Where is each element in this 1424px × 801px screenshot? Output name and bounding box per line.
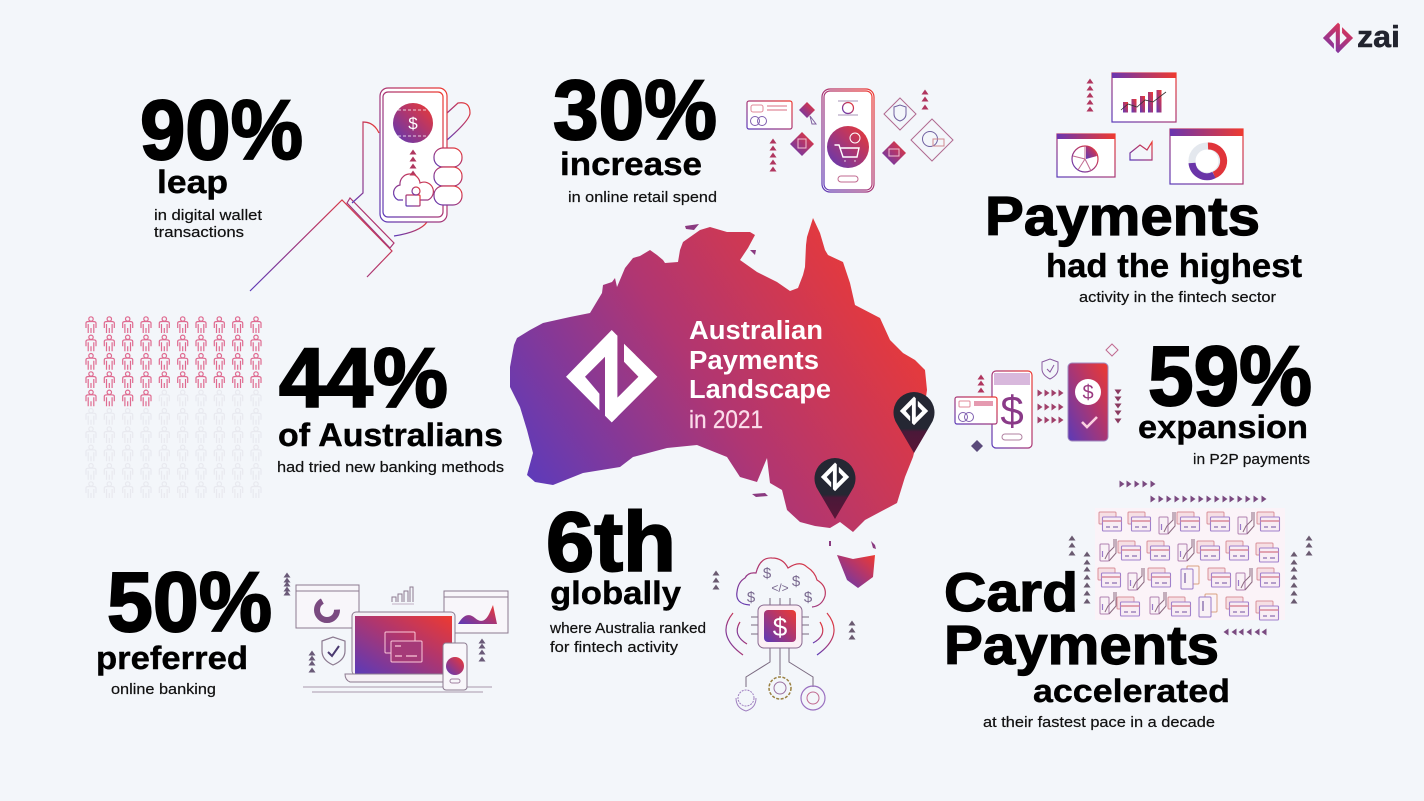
stat: card payments accelerated: Payments [944, 614, 1219, 676]
stat: 6th globally: globally [550, 575, 681, 611]
stat: card payments accelerated [944, 561, 1230, 731]
map title: Payments [689, 347, 819, 375]
pictogram: 44 of 100 people [86, 317, 261, 498]
Tasmania [837, 555, 875, 588]
icon: fintech cloud chip: </> [771, 581, 789, 595]
icon: analytics windows [1057, 73, 1243, 184]
stat: 90% leap: transactions [154, 225, 244, 241]
icon: P2P phones: $ [1082, 382, 1094, 404]
stat: 59% expansion: in P2P payments [1193, 452, 1310, 468]
stat: 44% of Australians: of Australians [278, 417, 503, 453]
stat: 44% of Australians: had tried new banking methods [277, 460, 504, 476]
stat: 50% preferred: preferred [96, 640, 248, 676]
stat: 30% increase: in online retail spend [568, 190, 717, 206]
map logo mark [566, 330, 657, 422]
icon: hand holding phone: $ [408, 114, 418, 133]
stat: payments had the highest: had the highest [1046, 247, 1302, 284]
map title: Landscape [689, 376, 831, 404]
map pin: Sydney [893, 392, 934, 453]
stat: payments had the highest: activity in the fintech sector [1079, 290, 1276, 306]
stat: 50% preferred: 50% [107, 555, 272, 649]
stat: 59% expansion: expansion [1138, 409, 1308, 445]
stat: 6th globally: where Australia ranked [549, 621, 706, 637]
coloured people [86, 317, 261, 406]
stat: 90% leap: in digital wallet [154, 208, 262, 224]
icon: fintech cloud chip: $ [747, 589, 756, 606]
stat: 44% of Australians [277, 331, 504, 476]
stat: card payments accelerated: at their fastest pace in a decade [983, 715, 1215, 731]
logo mark [1323, 23, 1353, 53]
icon: grid of payment cards [1068, 480, 1312, 636]
stat: 6th globally: for fintech activity [550, 640, 679, 656]
stat: 59% expansion: 59% [1148, 329, 1312, 423]
stat: card payments accelerated: Card [944, 561, 1078, 623]
stat: 30% increase: increase [560, 146, 702, 182]
icon: fintech cloud chip: $ [792, 573, 801, 590]
stat: 50% preferred: online banking [111, 682, 216, 698]
icon: online banking devices [284, 572, 508, 692]
stat: card payments accelerated: accelerated [1033, 673, 1230, 709]
icon: P2P phones [955, 344, 1122, 452]
small islands [685, 224, 876, 549]
stat: payments had the highest [985, 185, 1302, 306]
stat: 90% leap [140, 83, 303, 241]
stat: 90% leap: leap [157, 164, 228, 200]
icon: fintech cloud chip [712, 558, 856, 711]
stat: 30% increase: 30% [553, 63, 717, 157]
grey people [86, 390, 261, 498]
map title [689, 317, 831, 434]
map pin: Melbourne [814, 458, 856, 519]
icon: fintech cloud chip: $ [804, 589, 813, 606]
stat: 50% preferred [96, 555, 272, 698]
stat: 44% of Australians: 44% [279, 331, 448, 425]
icon: P2P phones: $ [1000, 387, 1024, 434]
stat: 59% expansion [1138, 329, 1312, 468]
icon: online retail phone and diamonds [747, 89, 953, 192]
map title: in 2021 [689, 406, 763, 434]
zai logo [1323, 19, 1400, 54]
icon: fintech cloud chip: $ [773, 612, 788, 642]
stat: 6th globally [546, 495, 706, 656]
map outline [510, 218, 927, 532]
icon: fintech cloud chip: $ [763, 565, 772, 582]
stat: 6th globally: 6th [546, 495, 676, 589]
stat: payments had the highest: Payments [985, 185, 1260, 247]
stat: 30% increase [553, 63, 717, 206]
stat: 90% leap: 90% [140, 83, 303, 177]
logo wordmark: zai [1357, 19, 1400, 54]
map title: Australian [689, 317, 823, 345]
icon: hand holding phone [250, 88, 470, 291]
central map of Australia [510, 218, 934, 588]
